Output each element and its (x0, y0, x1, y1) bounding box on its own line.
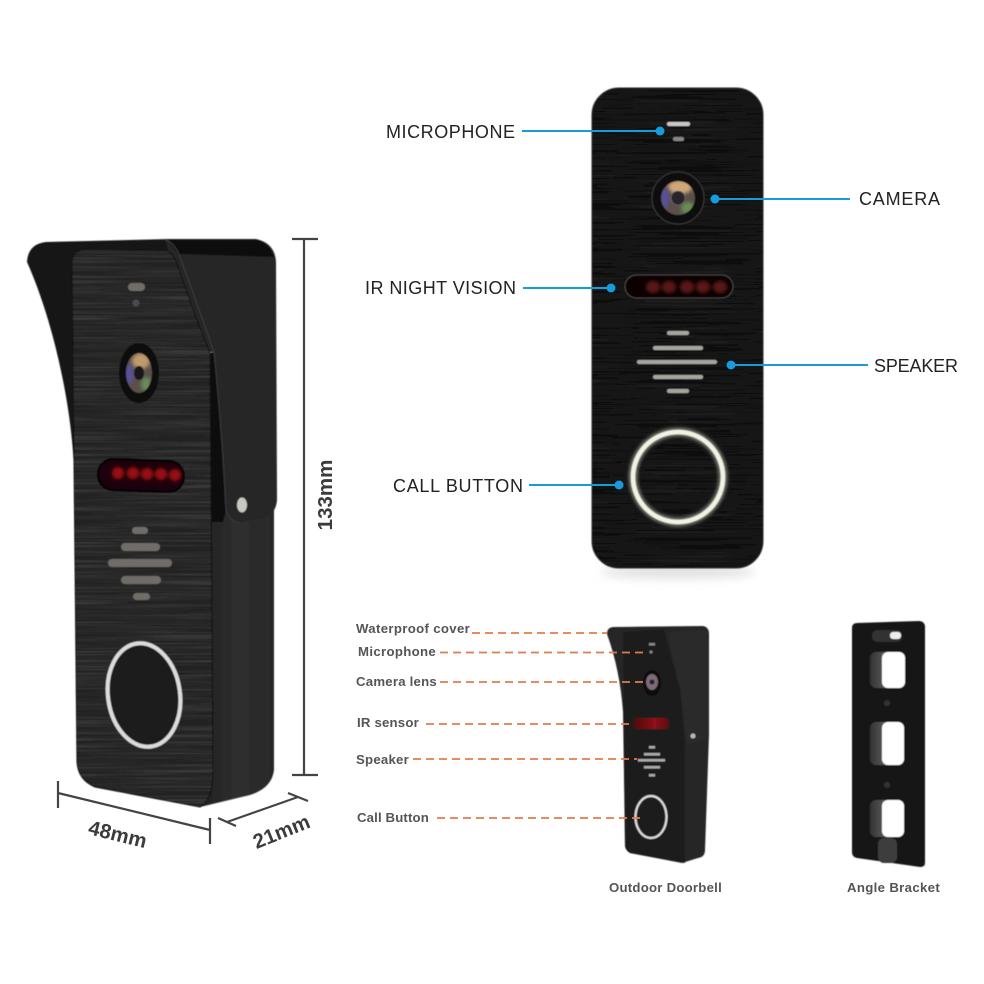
top slot (872, 630, 902, 642)
callout: IR night vision (365, 278, 616, 298)
brushed texture (70, 248, 216, 808)
cover top strip (168, 240, 274, 257)
bottom slot (878, 838, 897, 863)
caption: angle bracket: Angle Bracket (847, 880, 940, 895)
IR window (633, 718, 669, 729)
camera (119, 343, 159, 403)
caption: outdoor doorbell: Outdoor Doorbell (609, 880, 722, 895)
part labels with dashed leaders: Call Button (357, 810, 429, 825)
front plate (72, 249, 213, 807)
call button ring (101, 638, 187, 752)
part labels with dashed leaders: Waterproof cover (356, 621, 470, 636)
call ring (636, 796, 666, 838)
callout: camera (710, 189, 940, 209)
lens (643, 670, 661, 696)
angle bracket (852, 621, 925, 867)
screw hole (884, 782, 890, 788)
dimension: height: 133mm (314, 460, 337, 530)
IR window (97, 459, 184, 492)
small outdoor doorbell (607, 626, 709, 863)
front plate (623, 629, 685, 863)
callout: IR night vision: IR NIGHT VISION (365, 278, 516, 298)
part labels with dashed leaders: Camera lens (356, 674, 437, 689)
callout: call button: CALL BUTTON (393, 476, 523, 496)
callout: call button (393, 476, 624, 496)
part labels with dashed leaders (356, 621, 648, 825)
brushed texture (592, 88, 763, 568)
cover left wing (27, 239, 175, 470)
microphone holes (128, 283, 145, 306)
body and cover (607, 626, 709, 863)
lower opening (870, 800, 904, 837)
plate (852, 621, 925, 867)
tab (668, 630, 708, 745)
callout: speaker (726, 356, 958, 376)
callout: camera: CAMERA (859, 189, 940, 209)
middle opening (870, 722, 904, 765)
dimension: depth: 21mm (250, 810, 313, 854)
cover shadow (209, 352, 226, 522)
part labels with dashed leaders: Microphone (358, 644, 436, 659)
front doorbell (592, 88, 763, 568)
callout: speaker: SPEAKER (874, 356, 958, 376)
dimension: depth (218, 793, 313, 854)
part labels with dashed leaders: Speaker (356, 752, 409, 767)
speaker grille (108, 527, 172, 600)
call button ring (633, 432, 723, 522)
doorbell with waterproof cover, dimension view (27, 239, 277, 808)
reflection under front doorbell (600, 566, 756, 578)
microphone holes (667, 122, 690, 141)
IR window (625, 275, 733, 298)
part labels with dashed leaders: IR sensor (357, 715, 419, 730)
screw (690, 734, 696, 738)
mic holes (649, 643, 655, 654)
cover tab (165, 239, 277, 523)
dimension: width (58, 781, 210, 853)
body (592, 88, 763, 568)
callout: microphone (386, 122, 664, 142)
screw hole (884, 700, 890, 706)
dimension: height (292, 239, 337, 775)
camera (652, 172, 704, 224)
screw (237, 498, 247, 512)
cover edge highlight (165, 240, 240, 523)
speaker grille (637, 331, 717, 393)
callout: microphone: MICROPHONE (386, 122, 515, 142)
dimension: width: 48mm (86, 816, 149, 853)
speaker (638, 746, 665, 776)
upper opening (870, 652, 905, 688)
side body (200, 400, 274, 807)
